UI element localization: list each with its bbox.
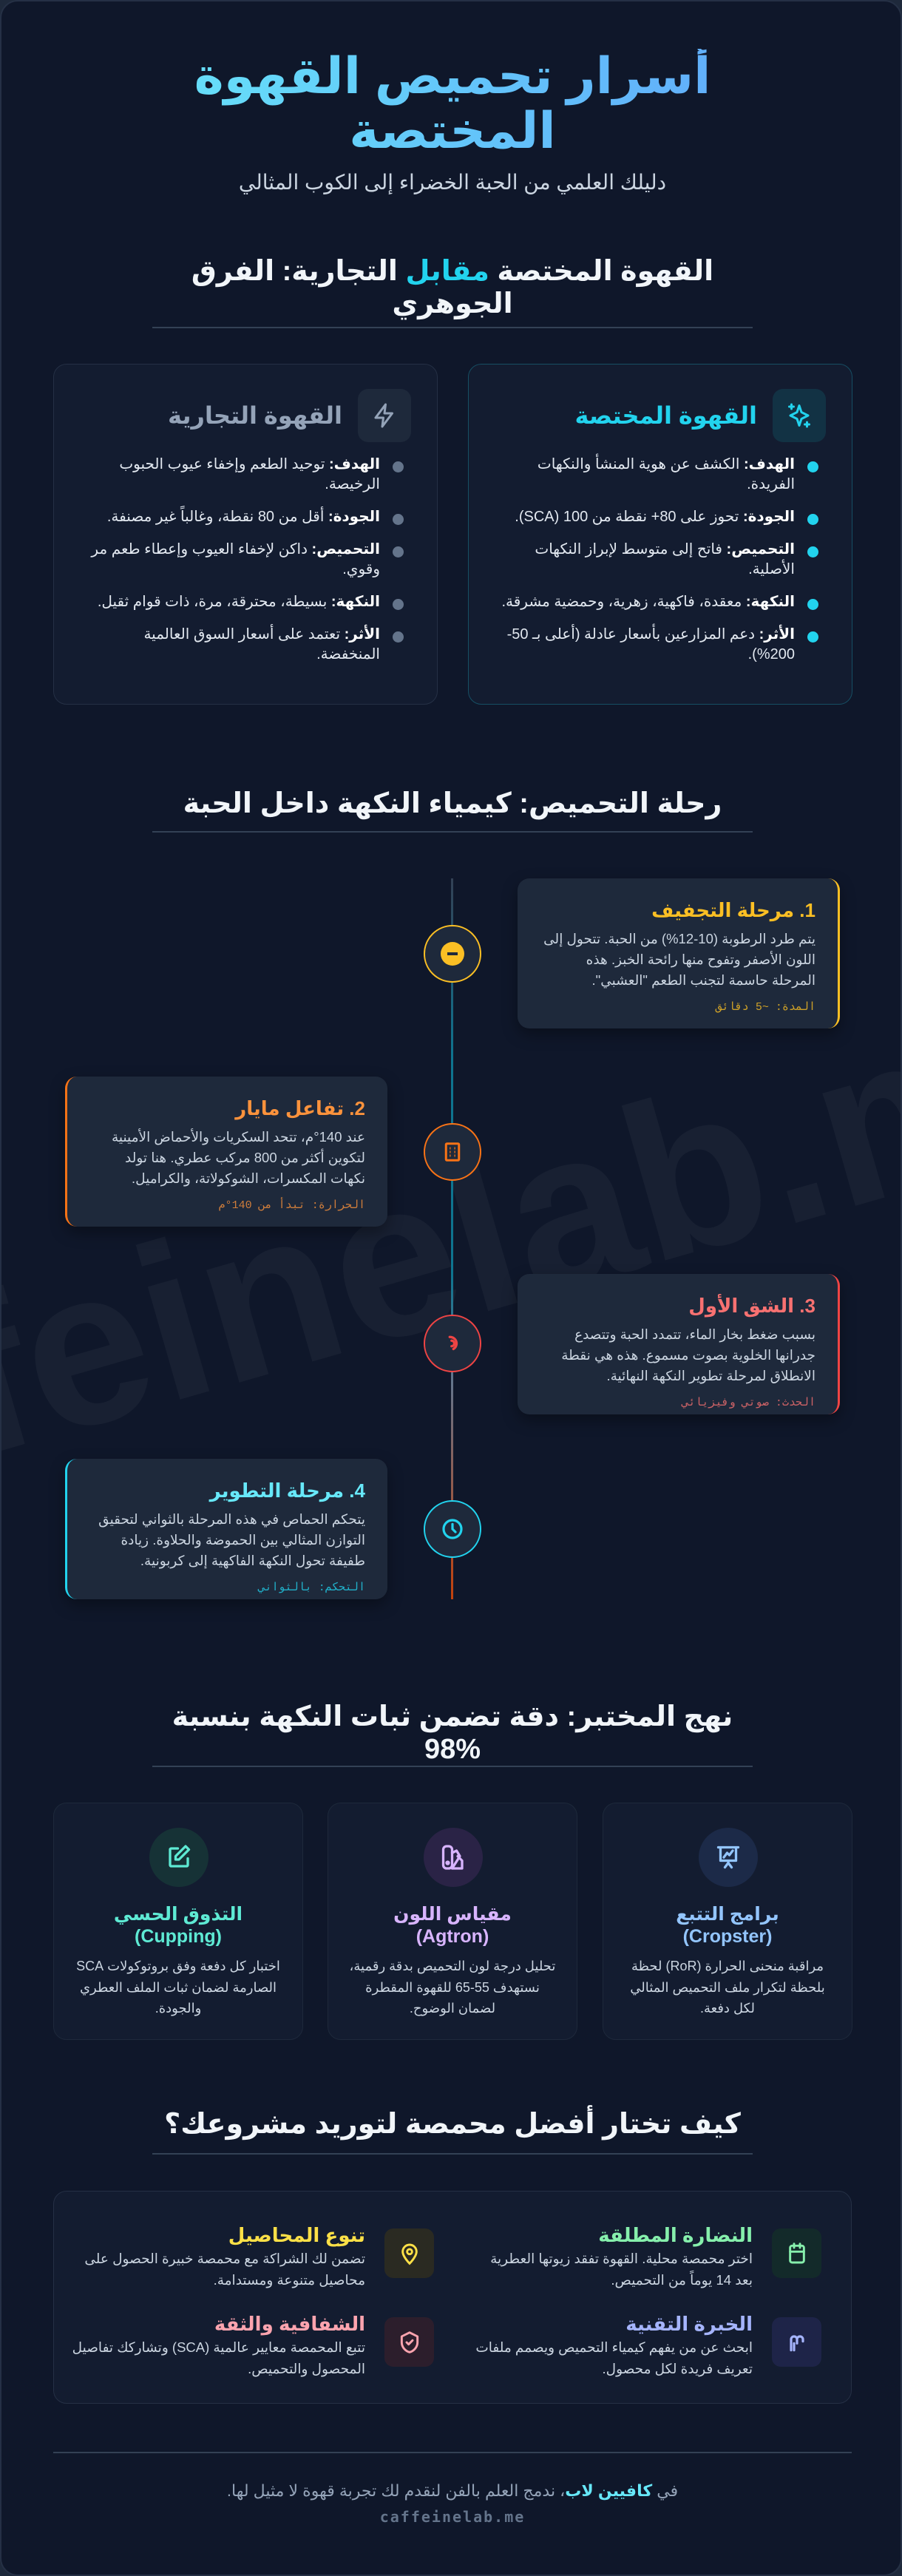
list: specialty traits: الهدف: الكشف عن هوية المنشأ والنكهات الفريدة. bbox=[538, 456, 795, 492]
criterion: expertise bbox=[475, 2313, 821, 2376]
heading: lab approach: نهج المختبر: دقة تضمن ثبات النكهة بنسبة bbox=[172, 1701, 733, 1732]
icon: sparkle bbox=[773, 389, 826, 442]
title bbox=[75, 49, 830, 158]
list: commercial traits: التحميص: داكن لإخفاء العيوب وإعطاء طعم مر وقوي. bbox=[91, 541, 380, 577]
panel: criteria: اختر محمصة محلية. القهوة تفقد زيوتها العطرية بعد 14 يوماً من التحميص. bbox=[490, 2251, 753, 2288]
subtitle: دليلك العلمي من الحبة الخضراء إلى الكوب المثالي bbox=[239, 171, 666, 194]
footer bbox=[53, 2452, 852, 2453]
card: Cupping bbox=[53, 1803, 303, 2040]
card: Agtron bbox=[328, 1803, 577, 2040]
list: specialty traits: الأثر: دعم المزارعين بأسعار عادلة (أعلى بـ 50-200%). bbox=[507, 626, 795, 662]
heading: roasting journey: رحلة التحميص: كيمياء النكهة داخل الحبة bbox=[183, 788, 722, 819]
criterion: transparency bbox=[72, 2313, 434, 2376]
timeline line bbox=[451, 878, 453, 1599]
card: Agtron: تحليل درجة لون التحميص بدقة رقمية، نستهدف 55-65 للقهوة المقطرة لضمان الوضوح. bbox=[350, 1959, 555, 2016]
heading: comparison: القهوة المختصة مقابل التجارية: الفرق bbox=[191, 256, 713, 287]
timeline card 2 bbox=[65, 1077, 387, 1227]
node 1 bbox=[424, 925, 481, 983]
timeline card 3 bbox=[518, 1274, 840, 1414]
timeline card 3: 3. الشق الأول bbox=[688, 1295, 815, 1317]
footer url: caffeinelab.me bbox=[380, 2508, 525, 2526]
timeline card 1 bbox=[518, 878, 840, 1028]
panel: criteria: تتبع المحمصة معايير عالمية (SCA) وتشاركك تفاصيل المحصول والتحميص. bbox=[72, 2339, 365, 2376]
card: Cropster bbox=[603, 1803, 852, 2040]
timeline card 2: عند 140°م، تتحد السكريات والأحماض الأمينية لتكوين أكثر من 800 مركب عطري. هنا تولد نكهات المكسرات، الشوكولاتة، والكراميل. bbox=[112, 1129, 365, 1186]
panel: commercial coffee bbox=[53, 364, 438, 705]
criterion: variety bbox=[84, 2224, 434, 2288]
timeline card 2: الحرارة: تبدأ من 140°م bbox=[219, 1199, 365, 1212]
list: commercial traits: النكهة: بسيطة، محترقة، مرة، ذات قوام ثقيل. bbox=[98, 594, 380, 610]
list: specialty traits: النكهة: معقدة، فاكهية، زهرية، وحمضية مشرقة. bbox=[501, 594, 795, 610]
panel: criteria bbox=[53, 2191, 852, 2404]
panel: specialty coffee bbox=[468, 364, 852, 705]
timeline card 4: 4. مرحلة التطوير bbox=[210, 1479, 365, 1502]
panel: criteria: الخبرة التقنية bbox=[625, 2313, 753, 2335]
list: commercial traits: الأثر: تعتمد على أسعار السوق العالمية bbox=[143, 626, 380, 643]
timeline card 3: بسبب ضغط بخار الماء، تتمدد الحبة وتتصدع جدرانها الخلوية بصوت مسموع. هذه هي نقطة الانطلاق لمرحلة تطوير النكهة النهائية. bbox=[561, 1326, 815, 1383]
card: Cropster: (Cropster) bbox=[683, 1926, 772, 1947]
heading: choosing a roaster: كيف تختار أفضل محمصة لتوريد مشروعك؟ bbox=[164, 2109, 741, 2140]
list: specialty traits bbox=[501, 454, 818, 662]
icon: pencil square bbox=[149, 1828, 208, 1887]
heading: lab approach: 98% bbox=[424, 1734, 481, 1765]
panel: criteria: ابحث عن من يفهم كيمياء التحميص ويصمم ملفات تعريف فريدة لكل محصول. bbox=[475, 2339, 753, 2376]
list: commercial traits: الهدف: توحيد الطعم وإخفاء عيوب الحبوب الرخيصة. bbox=[119, 456, 380, 492]
card: Cupping: التذوق الحسي bbox=[114, 1904, 243, 1925]
criterion: freshness bbox=[490, 2224, 821, 2288]
list: commercial traits: المنخفضة. bbox=[316, 646, 380, 662]
icon: lightning bbox=[358, 389, 411, 442]
heading: lab approach bbox=[172, 1701, 733, 1765]
node 2 bbox=[424, 1123, 481, 1181]
heading: comparison: الجوهري bbox=[392, 288, 513, 319]
list: commercial traits: الجودة: أقل من 80 نقطة، وغالباً غير مصنفة. bbox=[107, 509, 380, 525]
timeline card 4: التحكم: بالثواني bbox=[259, 1582, 365, 1594]
timeline card 4: يتحكم الحماص في هذه المرحلة بالثواني لتحقيق التوازن المثالي بين الحموضة والحلاوة. زيادة طفيفة تحول النكهة الفاكهية إلى كربونية. bbox=[98, 1511, 365, 1568]
list: commercial traits bbox=[90, 456, 404, 662]
list: specialty traits: الجودة: تحوز على 80+ نقطة من 100 (SCA). bbox=[515, 509, 795, 525]
card: Cropster: برامج التتبع bbox=[676, 1904, 779, 1925]
node 4 bbox=[424, 1500, 481, 1558]
icon: presentation chart bbox=[699, 1828, 758, 1887]
list: specialty traits: التحميص: فاتح إلى متوسط لإبراز النكهات الأصلية. bbox=[535, 541, 795, 577]
footer text: في كافيين لاب، ندمج العلم بالفن لنقدم لك تجربة قهوة لا مثيل لها. bbox=[227, 2481, 678, 2500]
timeline card 1: المدة: ~5 دقائق bbox=[716, 1001, 815, 1014]
heading: commercial: القهوة التجارية bbox=[168, 402, 342, 429]
timeline card 2: 2. تفاعل مايار bbox=[235, 1097, 365, 1119]
timeline card 1: 1. مرحلة التجفيف bbox=[651, 899, 815, 921]
panel: criteria: تنوع المحاصيل bbox=[228, 2224, 365, 2246]
timeline card 1: يتم طرد الرطوبة (10-12%) من الحبة. تتحول إلى اللون الأصفر وتفوح منها رائحة الخبز. هذه المرحلة حاسمة لتجنب الطعم "العشبي". bbox=[543, 931, 815, 988]
panel: criteria: تضمن لك الشراكة مع محمصة خبيرة الحصول على محاصيل متنوعة ومستدامة. bbox=[84, 2251, 365, 2288]
card: Cupping: (Cupping) bbox=[135, 1926, 222, 1947]
heading: comparison bbox=[191, 256, 713, 319]
timeline card 3: الحدث: صوتي وفيزيائي bbox=[682, 1397, 815, 1409]
panel: criteria: النضارة المطلقة bbox=[598, 2224, 753, 2246]
title: المختصة bbox=[349, 103, 556, 159]
node 3 bbox=[424, 1315, 481, 1372]
icon: swatch bbox=[424, 1828, 483, 1887]
card: Cropster: مراقبة منحنى الحرارة (RoR) لحظة بلحظة لتكرار ملف التحميص المثالي لكل دفعة. bbox=[630, 1959, 825, 2016]
card: Cupping: اختبار كل دفعة وفق بروتوكولات SCA الصارمة لضمان ثبات الملف العطري والجودة. bbox=[76, 1959, 280, 2016]
title: أسرار تحميص القهوة bbox=[194, 48, 711, 104]
heading: specialty: القهوة المختصة bbox=[575, 402, 757, 429]
card: Agtron: مقياس اللون bbox=[393, 1904, 512, 1925]
panel: criteria: الشفافية والثقة bbox=[214, 2313, 365, 2335]
card: Agtron: (Agtron) bbox=[416, 1926, 489, 1947]
timeline card 4 bbox=[65, 1459, 387, 1599]
